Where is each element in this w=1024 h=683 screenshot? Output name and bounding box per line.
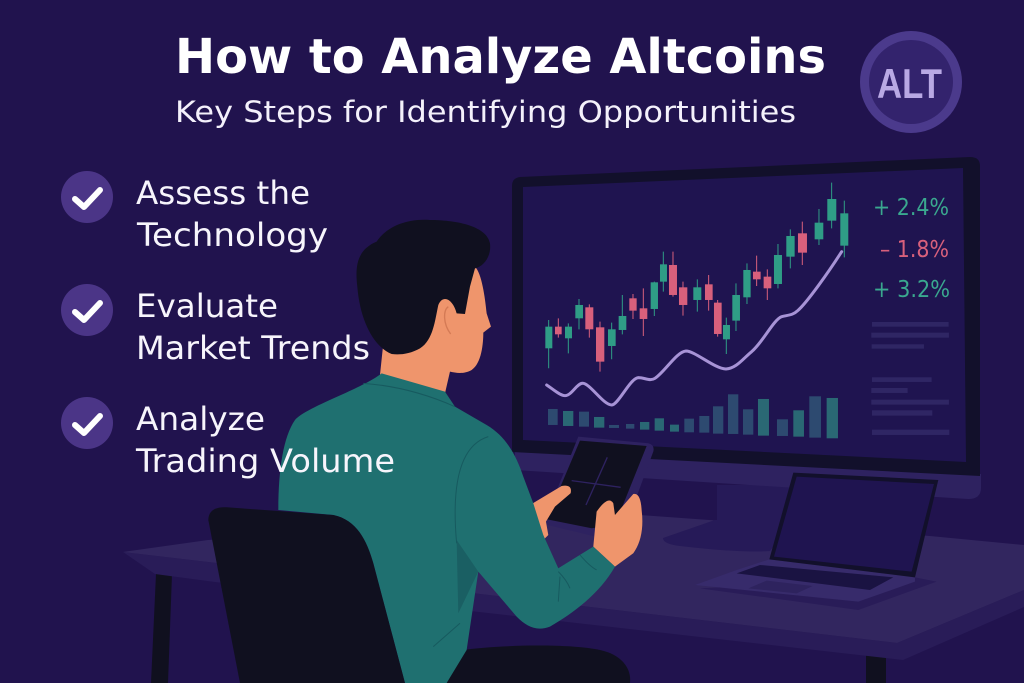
volume bars — [548, 394, 838, 438]
percentage readouts: + 2.4% — [873, 195, 949, 221]
step 1 — [61, 171, 328, 254]
ALT badge: ALT — [877, 60, 942, 107]
subtitle: Key Steps for Identifying Opportunities — [175, 95, 796, 129]
step 1: Technology — [136, 216, 328, 254]
check icon 2 — [61, 284, 113, 336]
step 2: Evaluate — [136, 287, 278, 325]
step 1: Assess the — [136, 174, 310, 212]
monitor stand — [663, 485, 795, 551]
trend line — [547, 252, 842, 405]
step 3: Analyze — [136, 400, 265, 438]
percentage readouts — [873, 195, 950, 303]
check icon 1 — [61, 171, 113, 223]
percentage readouts: + 3.2% — [873, 277, 950, 303]
title: How to Analyze Altcoins — [175, 29, 826, 85]
candlestick chart — [545, 183, 848, 372]
ear — [445, 307, 451, 334]
chair — [208, 507, 405, 683]
side text placeholder lines — [871, 322, 949, 435]
hair — [357, 220, 490, 354]
shirt — [278, 373, 615, 683]
check icon 3 — [61, 397, 113, 449]
monitor — [512, 157, 981, 499]
person — [208, 220, 654, 683]
neck and face — [380, 267, 491, 393]
step 3: Trading Volume — [135, 442, 395, 480]
step 2 — [61, 284, 370, 367]
tablet — [543, 437, 654, 536]
percentage readouts: – 1.8% — [880, 237, 949, 263]
legs — [447, 646, 630, 683]
hands — [530, 486, 642, 567]
step 2: Market Trends — [136, 329, 370, 367]
desk — [123, 515, 1024, 683]
step 3 — [61, 397, 395, 480]
shirt shading and seams — [363, 383, 597, 647]
laptop — [695, 473, 938, 610]
ALT badge — [860, 31, 962, 133]
